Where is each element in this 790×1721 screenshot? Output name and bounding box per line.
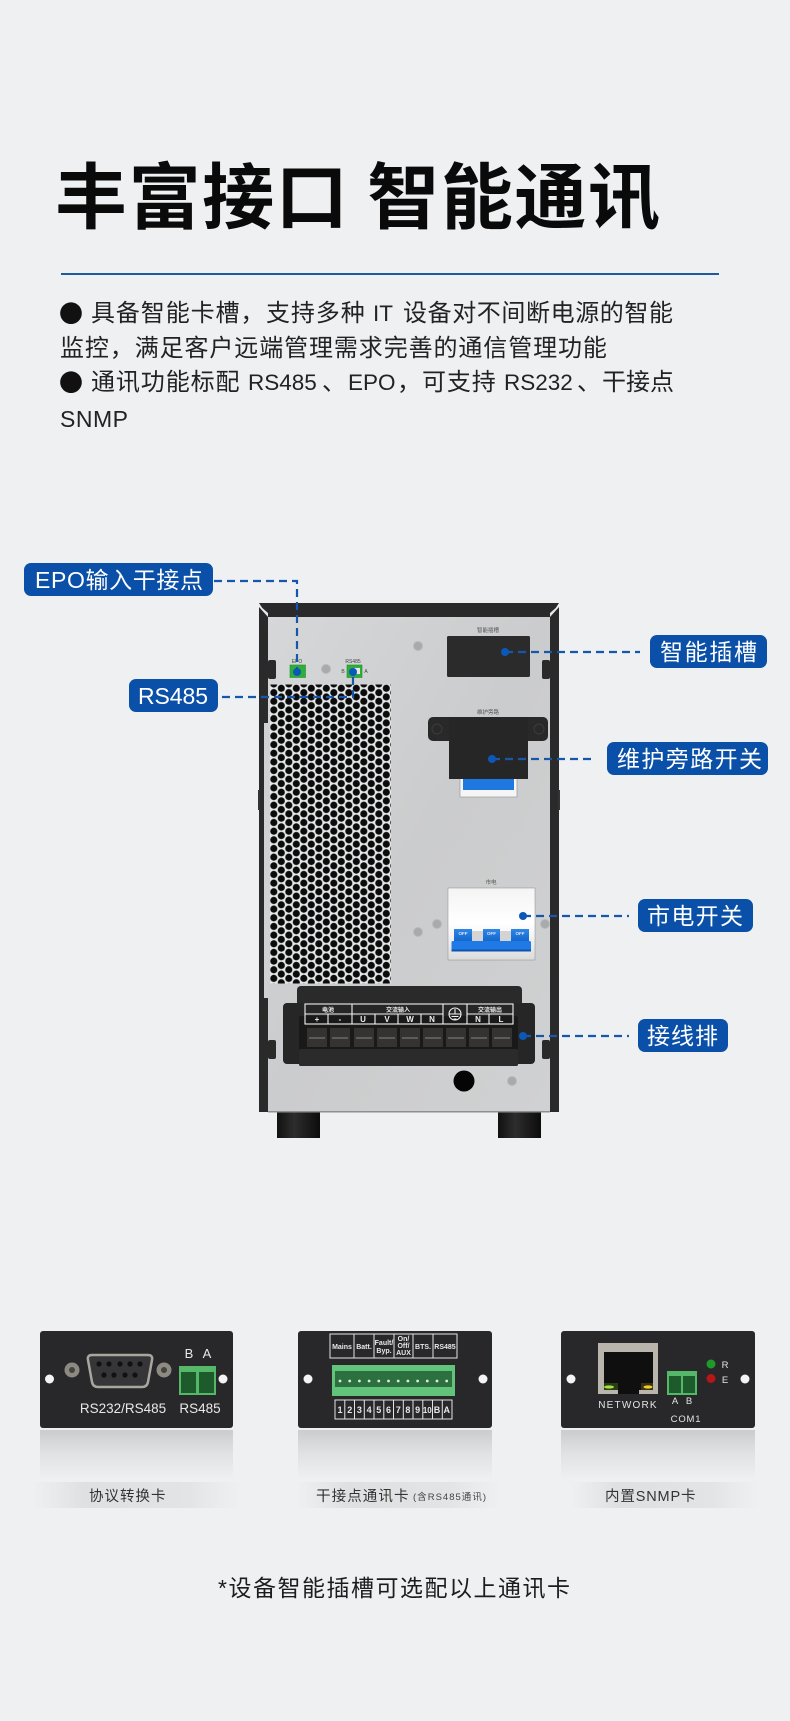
cabinet body bbox=[258, 603, 560, 1112]
port labels: COM1 bbox=[671, 1414, 701, 1425]
cable hole bbox=[454, 1070, 474, 1092]
leader: EPO bbox=[214, 581, 301, 676]
caption band bbox=[296, 1482, 502, 1508]
mains breaker: OFF bbox=[458, 931, 468, 936]
green terminal strip bbox=[332, 1365, 455, 1396]
RS485 connector bbox=[341, 659, 368, 678]
card: dry contact bbox=[296, 1331, 502, 1508]
pin number row: 6 bbox=[386, 1405, 391, 1415]
label: maintenance bypass switch: 维护旁路开关 bbox=[617, 746, 762, 772]
text block: feature bullets: 设备对不间断电源的智能 bbox=[403, 300, 674, 327]
pin number row: 1 bbox=[337, 1405, 343, 1415]
card reflection bbox=[561, 1430, 755, 1480]
label: terminal block bbox=[638, 1019, 728, 1052]
pin number row: 10 bbox=[423, 1406, 432, 1415]
text block: feature bullets: IT bbox=[373, 301, 393, 326]
label: mains switch bbox=[638, 899, 753, 932]
mains breaker: 市电 bbox=[485, 878, 497, 886]
signal label table: BTS. bbox=[415, 1344, 431, 1351]
signal label table: Batt. bbox=[356, 1344, 372, 1351]
signal label table: Fault/ bbox=[375, 1340, 393, 1347]
text block: feature bullets: 、 bbox=[577, 369, 602, 396]
leader: maintenance bypass bbox=[488, 755, 595, 763]
signal label table: RS485 bbox=[434, 1344, 456, 1351]
port labels: R bbox=[722, 1360, 729, 1371]
RS485 connector: A bbox=[364, 669, 368, 675]
screws bbox=[322, 642, 550, 1086]
text block: feature bullets: RS485 bbox=[248, 370, 317, 395]
label: terminal block: 接线排 bbox=[647, 1023, 718, 1049]
EPO connector bbox=[290, 659, 306, 678]
text block: feature bullets: EPO bbox=[348, 370, 396, 395]
terminal screws bbox=[307, 1028, 512, 1047]
card reflection bbox=[298, 1430, 492, 1480]
port labels: B bbox=[686, 1396, 692, 1407]
leader: mains switch bbox=[519, 912, 629, 920]
leader: terminal block bbox=[519, 1032, 629, 1040]
terminal labels: 电池 bbox=[322, 1005, 334, 1014]
title divider bbox=[61, 273, 719, 275]
mounting holes bbox=[566, 1374, 750, 1384]
caption note: (含RS485通讯) bbox=[413, 1491, 486, 1503]
caption: 内置SNMP卡 bbox=[605, 1488, 697, 1505]
terminal labels: L bbox=[499, 1015, 504, 1024]
ventilation grille bbox=[270, 684, 391, 984]
title: 丰富接口 智能通讯 bbox=[55, 139, 660, 244]
mains breaker: OFF bbox=[516, 931, 525, 936]
cabinet feet bbox=[277, 1112, 541, 1138]
text block: feature bullets: SNMP bbox=[60, 406, 128, 432]
pin number row: 2 bbox=[347, 1405, 352, 1415]
port labels: B bbox=[185, 1346, 193, 1361]
terminal labels: W bbox=[406, 1015, 414, 1024]
port labels bbox=[80, 1346, 221, 1416]
mounting holes bbox=[45, 1374, 228, 1384]
text block: feature bullets: 具备智能卡槽， bbox=[91, 300, 265, 327]
label: RS485: RS485 bbox=[138, 683, 208, 709]
label: RS485 bbox=[129, 679, 218, 712]
RS485 connector: RS485 bbox=[345, 659, 361, 665]
caption band bbox=[570, 1482, 760, 1508]
pin number row: 5 bbox=[376, 1405, 381, 1415]
label: smart slot bbox=[650, 635, 767, 668]
terminal labels: V bbox=[384, 1015, 390, 1024]
caption band bbox=[32, 1482, 242, 1508]
status LEDs bbox=[706, 1360, 716, 1383]
mounting holes bbox=[304, 1374, 488, 1384]
pin number row: 9 bbox=[415, 1405, 420, 1415]
text block: feature bullets: ● bbox=[59, 363, 83, 398]
signal label table: Byp. bbox=[376, 1348, 392, 1355]
terminal labels: 交流输出 bbox=[478, 1005, 502, 1014]
RS485 connector: B bbox=[341, 669, 345, 675]
signal label table: Mains bbox=[332, 1344, 352, 1351]
smart slot: 智能插槽 bbox=[477, 626, 499, 634]
terminal labels: + bbox=[315, 1015, 320, 1024]
pin number row: 8 bbox=[405, 1405, 410, 1415]
pin number row: 3 bbox=[357, 1405, 362, 1415]
port labels: RS232/RS485 bbox=[80, 1401, 166, 1416]
text block: feature bullets: ， bbox=[397, 369, 422, 396]
text block: feature bullets: RS232 bbox=[504, 370, 573, 395]
terminal labels: 交流输入 bbox=[386, 1005, 410, 1014]
text block: feature bullets: 监控，满足客户远端管理需求完善的通信管理功能 bbox=[60, 335, 608, 362]
port labels: E bbox=[722, 1375, 728, 1386]
leader: RS485 bbox=[222, 668, 357, 697]
terminal labels bbox=[315, 1005, 504, 1024]
card plate bbox=[298, 1331, 492, 1428]
terminal labels: U bbox=[360, 1015, 366, 1024]
text block: feature bullets bbox=[59, 294, 674, 432]
pin number row: 4 bbox=[367, 1405, 372, 1415]
pin number row: 7 bbox=[396, 1405, 401, 1415]
port labels: A bbox=[203, 1346, 212, 1361]
card plate bbox=[561, 1331, 755, 1428]
port labels bbox=[598, 1360, 729, 1425]
mains breaker bbox=[448, 878, 535, 960]
terminal block bbox=[283, 986, 535, 1066]
port labels: A bbox=[672, 1396, 679, 1407]
text block: feature bullets: 、 bbox=[322, 369, 347, 396]
maintenance bypass switch bbox=[428, 708, 548, 797]
caption: 协议转换卡 bbox=[89, 1488, 167, 1505]
mains breaker: OFF bbox=[487, 931, 496, 936]
signal label table: Off/ bbox=[397, 1343, 410, 1350]
caption: 干接点通讯卡 bbox=[316, 1488, 410, 1505]
pin number row: B bbox=[434, 1405, 441, 1415]
label: smart slot: 智能插槽 bbox=[660, 639, 757, 665]
green terminal bbox=[179, 1366, 216, 1395]
smart slot bbox=[447, 626, 530, 677]
text block: feature bullets: 可支持 bbox=[422, 369, 497, 396]
RJ45 port bbox=[598, 1343, 658, 1394]
text block: feature bullets: ● bbox=[59, 294, 83, 329]
port labels: RS485 bbox=[179, 1401, 221, 1416]
text block: feature bullets: 干接点 bbox=[602, 369, 674, 396]
card plate bbox=[40, 1331, 233, 1428]
D-sub connector bbox=[64, 1355, 172, 1387]
label: EPO input dry contact: EPO输入干接点 bbox=[35, 567, 203, 593]
footnote: *设备智能插槽可选配以上通讯卡 bbox=[218, 1575, 570, 1601]
terminal labels: N bbox=[475, 1015, 481, 1024]
card reflection bbox=[40, 1430, 233, 1480]
EPO connector: EPO bbox=[292, 659, 302, 665]
leader: smart slot bbox=[501, 648, 640, 656]
text block: feature bullets: 通讯功能标配 bbox=[91, 369, 240, 396]
pin number row: A bbox=[443, 1405, 450, 1415]
text block: feature bullets: 支持多种 bbox=[266, 300, 366, 327]
signal label table: On/ bbox=[398, 1336, 409, 1343]
signal label table bbox=[330, 1334, 457, 1358]
terminal label table bbox=[305, 1004, 513, 1024]
terminal labels: - bbox=[339, 1015, 342, 1024]
port labels: NETWORK bbox=[598, 1400, 658, 1411]
card: SNMP bbox=[561, 1331, 760, 1508]
green terminal bbox=[667, 1371, 697, 1395]
signal label table: AUX bbox=[396, 1350, 411, 1357]
card: protocol converter bbox=[32, 1331, 242, 1508]
terminal labels: N bbox=[429, 1015, 435, 1024]
maintenance bypass switch: 维护旁路 bbox=[477, 708, 499, 716]
label: mains switch: 市电开关 bbox=[647, 903, 743, 929]
UPS cabinet rear view bbox=[24, 563, 768, 1601]
pin number row bbox=[335, 1400, 452, 1419]
